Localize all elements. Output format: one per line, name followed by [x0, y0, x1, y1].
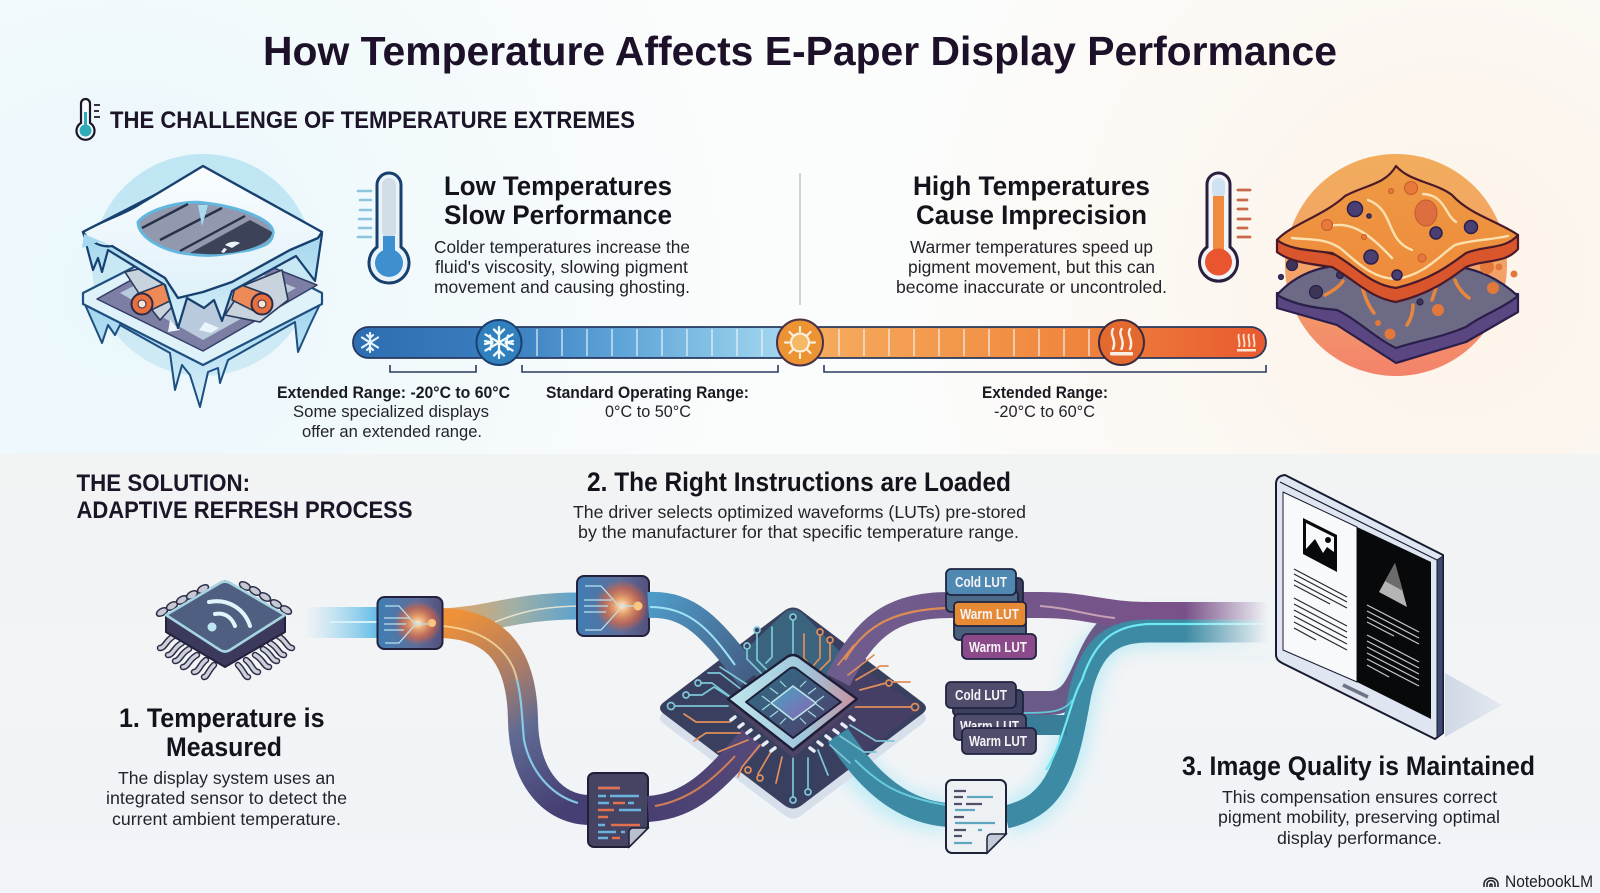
icon: heat node	[1099, 320, 1144, 365]
label: standard operating range: 0°C to 50°C	[605, 403, 691, 421]
text block: high temperatures: High Temperatures	[913, 171, 1150, 201]
right side glow	[848, 630, 1270, 817]
exposed screen	[138, 202, 273, 255]
icon: sensor chip	[155, 580, 293, 677]
cold lut card: Cold LUT	[955, 688, 1007, 704]
side edge	[1437, 556, 1443, 738]
step 2 text: The driver selects optimized waveforms (LUTs) pre-stored	[573, 502, 1026, 522]
label: extended range cold	[277, 384, 510, 441]
top section background	[0, 0, 1600, 454]
text block: high temperatures	[896, 171, 1167, 297]
icon: code document	[588, 773, 648, 847]
pipe: purple output	[946, 605, 1276, 615]
text block: low temperatures	[434, 171, 690, 297]
chip pins	[731, 717, 854, 751]
step 3 text: This compensation ensures correct	[1222, 787, 1497, 807]
section heading: the solution: THE SOLUTION:	[76, 470, 250, 497]
flow pipes: outer routes	[305, 590, 1276, 817]
step 3 text: display performance.	[1277, 828, 1442, 848]
step 2 text: by the manufacturer for that specific temperature range.	[578, 522, 1019, 542]
beam into the first processor	[305, 607, 380, 638]
title: How Temperature Affects E-Paper Display Performance	[263, 28, 1337, 74]
step 1 text	[106, 703, 347, 829]
right screen panel	[1357, 527, 1431, 719]
section heading: the challenge	[76, 99, 635, 140]
upper lava slab side	[1277, 235, 1518, 302]
text block: high temperatures: Warmer temperatures speed up	[910, 237, 1153, 257]
home bar	[1343, 685, 1368, 697]
label: extended range hot: -20°C to 60°C	[994, 403, 1095, 421]
text block: low temperatures: fluid's viscosity, slowing pigment	[435, 257, 688, 277]
icon: heading thermometer	[76, 99, 100, 140]
icon: signal processor two	[577, 576, 649, 636]
pipes crossing the board	[648, 605, 950, 815]
step 3 text: pigment mobility, preserving optimal	[1218, 807, 1500, 827]
step 3 text	[1182, 751, 1535, 848]
label: extended range cold: Extended Range: -20°C to 60°C	[277, 384, 510, 402]
text block: low temperatures: Colder temperatures increase the	[434, 237, 690, 257]
text block: high temperatures: pigment movement, but this can	[908, 257, 1155, 277]
label: extended range hot: Extended Range:	[982, 384, 1108, 402]
illustration: frozen e-paper layers	[82, 154, 322, 407]
icon: hot thermometer	[1200, 173, 1250, 281]
bottom section background	[0, 454, 1600, 893]
icon: light document	[946, 780, 1006, 853]
cold lut card: Cold LUT	[955, 575, 1007, 591]
icon: cold thermometer	[358, 173, 409, 283]
section heading: the solution	[76, 470, 412, 524]
text block: low temperatures: Slow Performance	[444, 200, 672, 230]
temperature scale bar	[353, 320, 1266, 366]
text block: low temperatures: movement and causing ghosting.	[434, 277, 690, 297]
section heading: the challenge: THE CHALLENGE OF TEMPERATURE EXTREMES	[110, 107, 635, 134]
lower slab	[83, 232, 322, 365]
pipe: second lut group upward	[1020, 615, 1130, 703]
lut stack one	[946, 569, 1036, 659]
step 2 text: 2. The Right Instructions are Loaded	[587, 467, 1011, 497]
icon: snowflake node	[476, 320, 522, 365]
lut stack two	[946, 682, 1036, 754]
label: standard operating range: Standard Operating Range:	[546, 384, 749, 402]
divider	[799, 173, 801, 305]
circuit traces	[668, 617, 914, 800]
icon: sun node	[777, 320, 823, 366]
output fade	[1185, 590, 1276, 656]
label: extended range cold: offer an extended range.	[302, 423, 482, 441]
warm lut card orange: Warm LUT	[960, 607, 1019, 623]
illustration: overheated e-paper layers	[1277, 154, 1518, 376]
pipe: teal output	[1006, 631, 1276, 817]
label: standard operating range	[546, 384, 749, 421]
shadow	[1445, 673, 1502, 737]
label: extended range hot	[982, 384, 1108, 421]
step 3 text: 3. Image Quality is Maintained	[1182, 751, 1535, 781]
text block: low temperatures: Low Temperatures	[444, 171, 672, 201]
chip body	[728, 655, 857, 758]
text block: high temperatures: Cause Imprecision	[916, 200, 1147, 230]
rollers	[125, 262, 183, 320]
step 1 text: current ambient temperature.	[112, 809, 341, 829]
rear cards	[946, 578, 1026, 640]
lower icicles	[83, 240, 322, 407]
icon: e-paper tablet	[1276, 475, 1502, 739]
icon: signal processor one	[378, 597, 442, 649]
picture icon	[1303, 518, 1337, 572]
warm lut card hidden: Warm LUT	[960, 719, 1019, 735]
step 1 text: Measured	[166, 732, 282, 762]
pipe: to second processor	[442, 606, 578, 622]
tick marks	[537, 329, 1089, 356]
rear card	[953, 690, 1023, 716]
watermark: NotebookLM: NotebookLM	[1505, 873, 1593, 891]
pyramid	[1379, 563, 1407, 607]
icon: small snowflake	[362, 333, 378, 352]
upper lava slab top	[1277, 166, 1518, 288]
icon: small heat	[1237, 334, 1256, 352]
central board	[648, 605, 950, 818]
left screen panel	[1283, 492, 1357, 682]
lower slab side	[1277, 293, 1518, 363]
inverse text lines	[1367, 605, 1419, 686]
warm lut card front: Warm LUT	[969, 734, 1027, 750]
step 2 text	[573, 467, 1026, 542]
text lines	[1294, 569, 1347, 650]
range brackets	[390, 365, 1266, 372]
lower slab top	[1277, 265, 1518, 348]
pigment swirls	[1292, 194, 1508, 279]
step 1 text: integrated sensor to detect the	[106, 788, 347, 808]
section heading: the solution: ADAPTIVE REFRESH PROCESS	[76, 497, 412, 524]
upper slab with icicles	[83, 170, 322, 328]
label: extended range cold: Some specialized displays	[293, 403, 489, 421]
text block: high temperatures: become inaccurate or uncontroled.	[896, 277, 1167, 297]
warm lut card purple: Warm LUT	[969, 640, 1027, 656]
pipe: to code document	[442, 623, 590, 810]
temperature ticks	[358, 191, 371, 237]
temperature ticks	[1238, 190, 1250, 237]
tablet casing	[1276, 475, 1443, 739]
step 1 text: 1. Temperature is	[119, 703, 324, 733]
step 1 text: The display system uses an	[118, 768, 335, 788]
